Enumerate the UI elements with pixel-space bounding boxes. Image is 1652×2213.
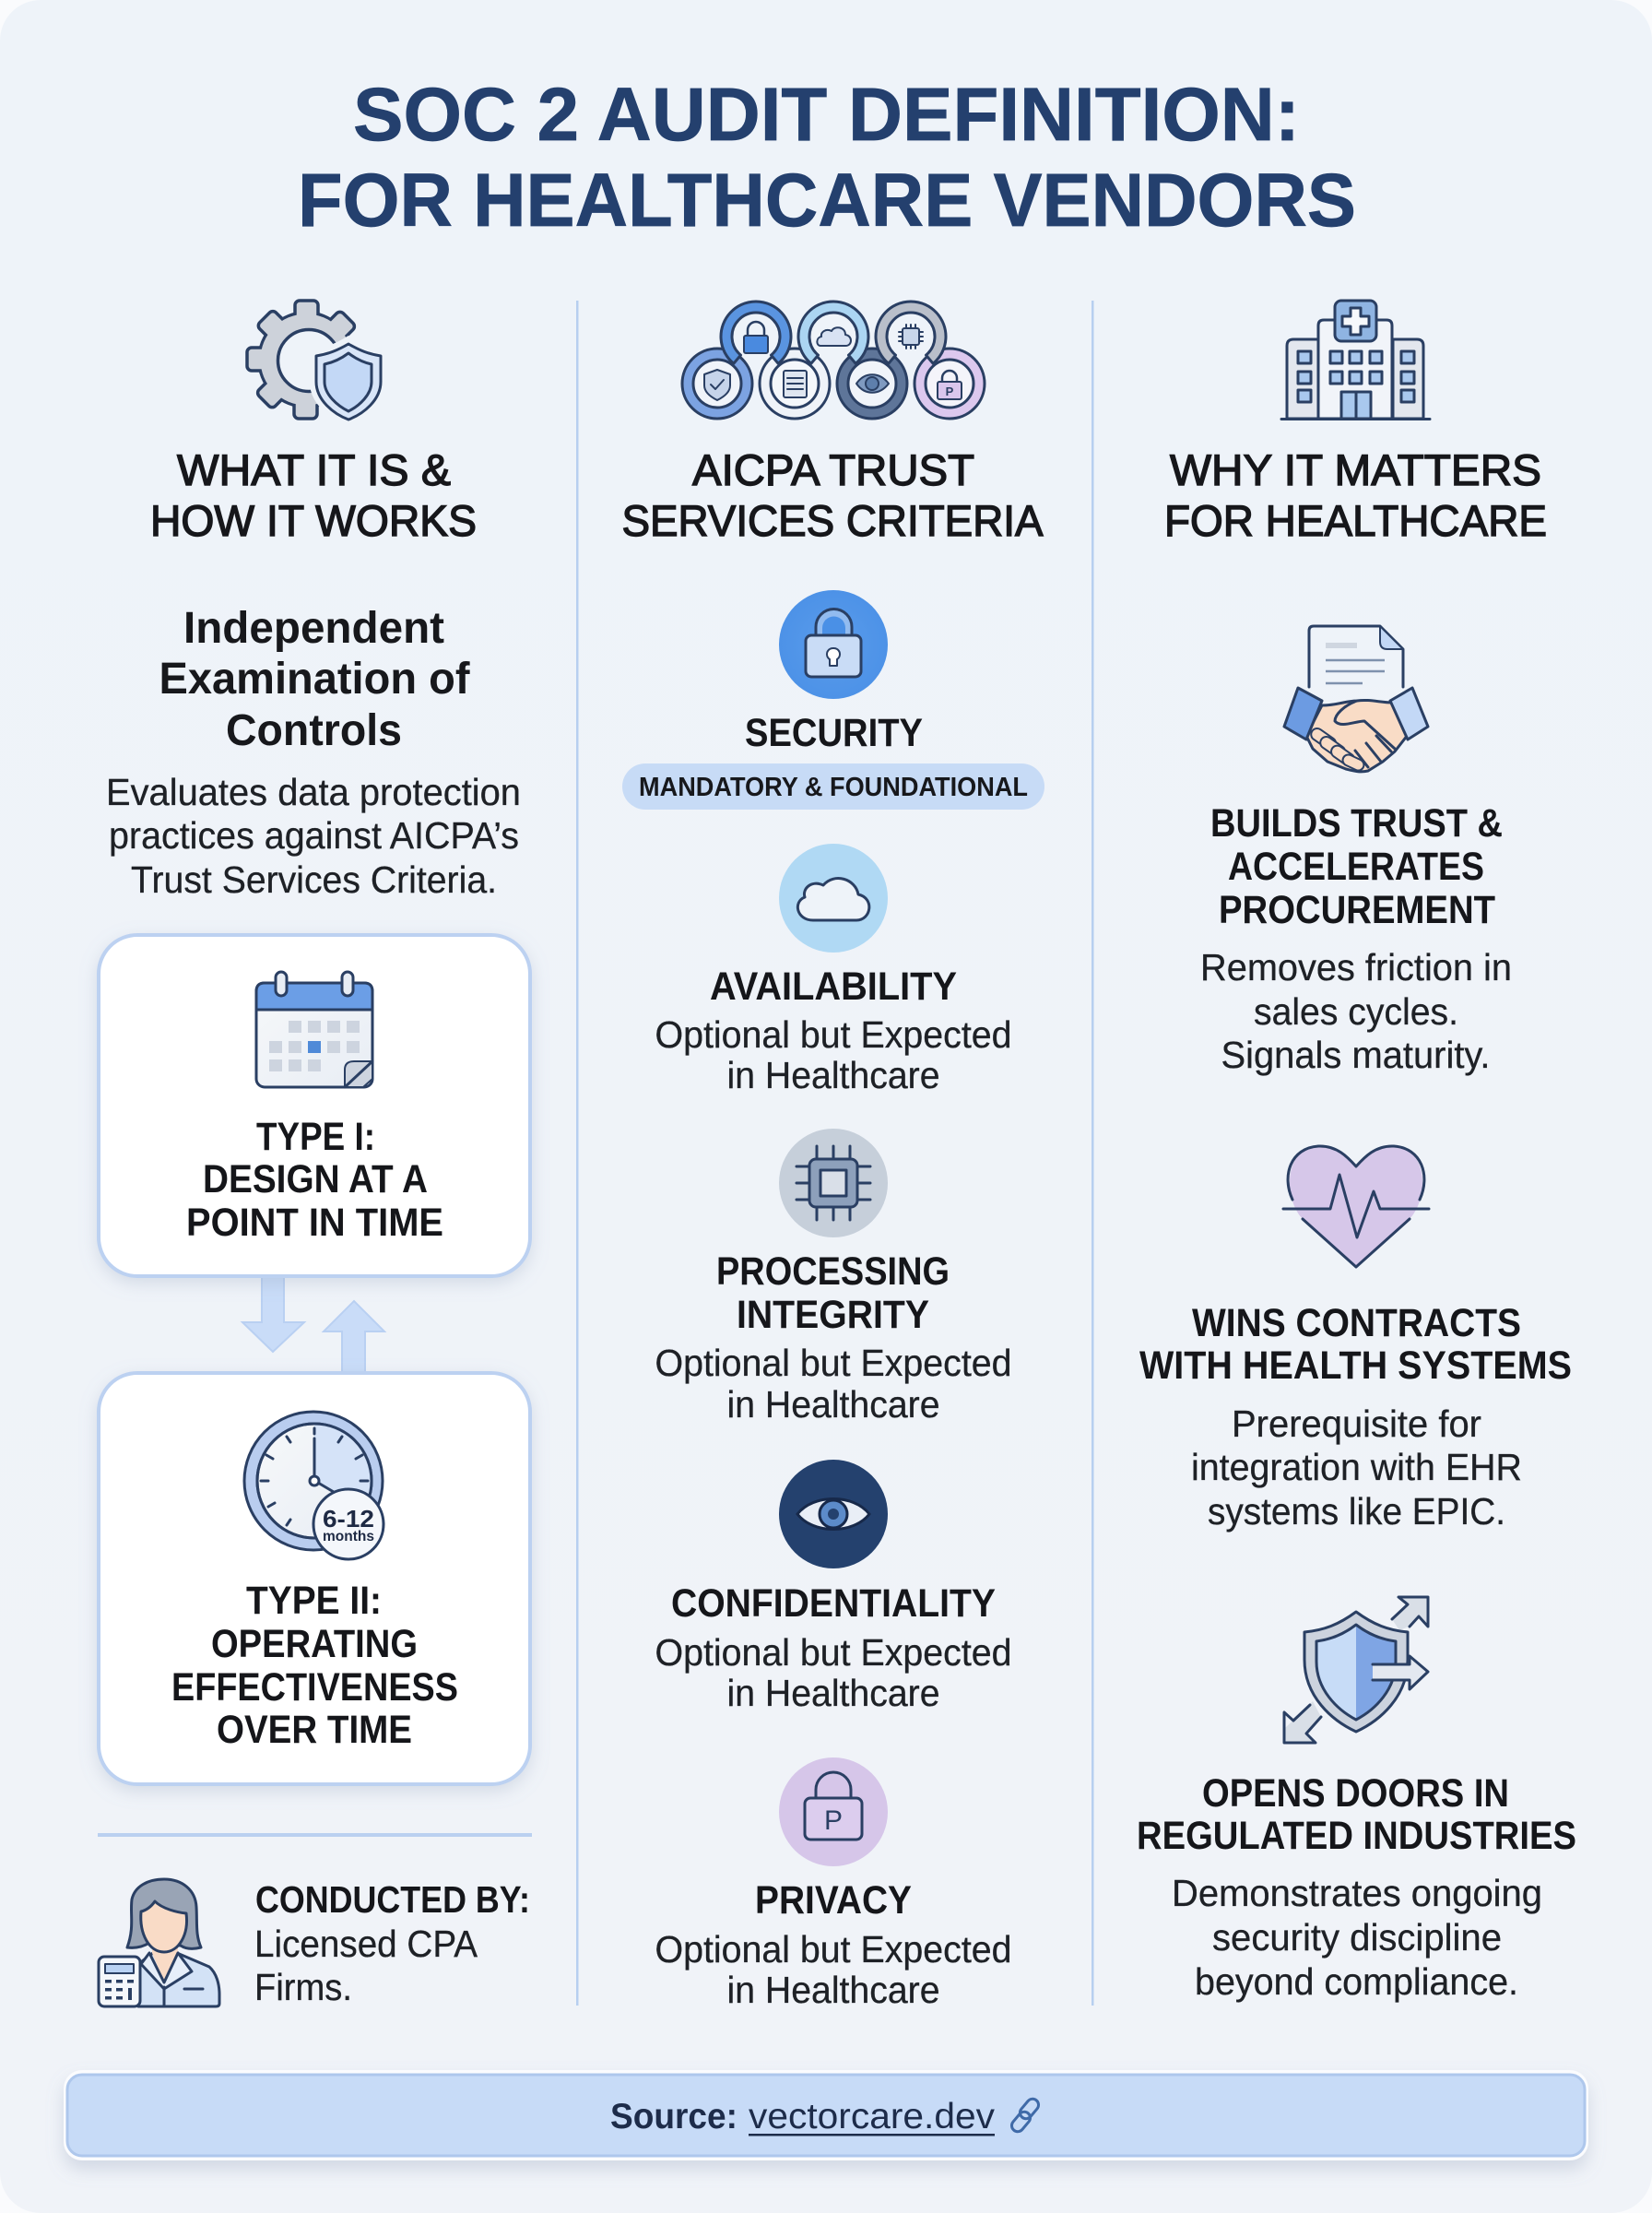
icon: linked rings of criteria: P: [946, 385, 954, 398]
subheading: independent examination: [159, 604, 470, 755]
criterion: availability: AVAILABILITY: [710, 964, 957, 1009]
icon: security padlock: [779, 590, 888, 699]
criterion: privacy: in Healthcare: [726, 1969, 940, 2011]
heading: AICPA trust services criteria: AICPA TRUST: [692, 445, 974, 494]
subheading: independent examination: Independent: [183, 604, 444, 653]
label: type II: TYPE II:: [246, 1579, 382, 1623]
title: FOR HEALTHCARE VENDORS: [298, 159, 1356, 243]
card: type I: [99, 935, 530, 1276]
criterion: availability: [655, 844, 1012, 1096]
heading: what it is: HOW IT WORKS: [150, 496, 477, 545]
card: type II: [99, 1373, 530, 1784]
badge: mandatory and foundational: MANDATORY & FOUNDATIONAL: [639, 773, 1028, 802]
benefit: opens doors: beyond compliance.: [1195, 1960, 1518, 2003]
label: type II: EFFECTIVENESS: [171, 1665, 458, 1710]
icon: cloud: [779, 844, 888, 953]
benefit: opens doors: [1137, 1597, 1576, 2003]
criterion: confidentiality: [655, 1460, 1012, 1714]
icon: clock with 6-12 months badge: 6-12: [323, 1505, 374, 1533]
benefit: builds trust: PROCUREMENT: [1219, 888, 1495, 932]
heading: AICPA trust services criteria: SERVICES CRITERIA: [621, 496, 1044, 545]
text block: conducted by: Licensed CPA: [254, 1923, 478, 1965]
label: type I: TYPE I:: [256, 1115, 375, 1159]
criterion: availability: Optional but Expected: [655, 1013, 1012, 1056]
heading: what it is: [150, 445, 477, 545]
criterion: processing integrity: [655, 1129, 1012, 1426]
criterion: confidentiality: Optional but Expected: [655, 1631, 1012, 1674]
criterion: privacy: Optional but Expected: [655, 1928, 1012, 1970]
icon: gear and shield: [247, 301, 387, 427]
label: type II: [171, 1579, 458, 1752]
benefit: builds trust: [1200, 626, 1512, 1076]
text block: evaluates data protection: Evaluates data protection: [106, 771, 521, 813]
arrow: up to type I: [324, 1301, 384, 1376]
heading: why it matters: FOR HEALTHCARE: [1164, 496, 1547, 545]
heading: why it matters: WHY IT MATTERS: [1170, 445, 1541, 494]
criterion: security: SECURITY: [745, 711, 923, 755]
icon: document and handshake: [1284, 626, 1428, 773]
benefit: wins contracts: WINS CONTRACTS: [1192, 1301, 1521, 1345]
benefit: opens doors: OPENS DOORS IN: [1202, 1771, 1509, 1816]
title: [298, 73, 1356, 243]
benefit: wins contracts: Prerequisite for: [1232, 1402, 1481, 1445]
benefit: opens doors: REGULATED INDUSTRIES: [1137, 1814, 1576, 1858]
label: type I: DESIGN AT A: [203, 1157, 428, 1201]
benefit: wins contracts: systems like EPIC.: [1208, 1490, 1505, 1533]
footer: source bar: vectorcare.dev: [749, 2097, 996, 2136]
subheading: independent examination: Controls: [226, 706, 402, 755]
heading: what it is: WHAT IT IS &: [177, 445, 451, 494]
benefit: opens doors: Demonstrates ongoing: [1172, 1872, 1542, 1914]
text block: evaluates data protection: Trust Services Criteria.: [131, 858, 497, 901]
icon: heart with pulse: [1283, 1146, 1429, 1267]
benefit: builds trust: ACCELERATES: [1228, 845, 1484, 889]
icon: link: [1009, 2097, 1041, 2134]
title: SOC 2 AUDIT DEFINITION:: [353, 73, 1300, 157]
text block: conducted by: Firms.: [254, 1966, 352, 2008]
criterion: security: [622, 590, 1044, 810]
label: type I: [186, 1115, 443, 1245]
icon: calendar: [256, 972, 372, 1087]
panel: AICPA trust services criteria: [621, 302, 1044, 2011]
benefit: builds trust: Removes friction in: [1200, 946, 1512, 988]
icon: chip: [779, 1129, 888, 1237]
criterion: processing integrity: Optional but Expected: [655, 1342, 1012, 1384]
text block: conducted by: [254, 1878, 530, 2008]
label: type II: OPERATING: [211, 1622, 418, 1666]
icon: privacy padlock: P: [824, 1805, 843, 1836]
icon: hospital: [1281, 301, 1430, 419]
benefit: opens doors: security discipline: [1212, 1916, 1502, 1959]
criterion: processing integrity: in Healthcare: [726, 1383, 940, 1426]
heading: AICPA trust services criteria: [621, 445, 1044, 545]
benefit: builds trust: sales cycles.: [1254, 990, 1458, 1033]
benefit: wins contracts: WITH HEALTH SYSTEMS: [1139, 1343, 1572, 1388]
icon: linked rings of criteria: [682, 302, 985, 419]
panel: why it matters for healthcare: [1137, 301, 1576, 2003]
heading: why it matters: [1164, 445, 1547, 545]
benefit: builds trust: Signals maturity.: [1221, 1034, 1490, 1076]
label: type II: OVER TIME: [217, 1708, 412, 1752]
benefit: wins contracts: [1139, 1146, 1572, 1533]
panel: what it is and how it works: [98, 301, 532, 2008]
text block: conducted by: CONDUCTED BY:: [255, 1878, 530, 1921]
icon: auditor with calculator: [99, 1879, 219, 2006]
icon: eye: [779, 1460, 888, 1568]
benefit: wins contracts: integration with EHR: [1191, 1446, 1522, 1488]
badge: mandatory and foundational: [622, 763, 1044, 810]
criterion: confidentiality: in Healthcare: [726, 1672, 940, 1714]
criterion: availability: in Healthcare: [726, 1054, 940, 1096]
criterion: confidentiality: CONFIDENTIALITY: [671, 1581, 996, 1626]
arrow: down to type II: [242, 1274, 304, 1352]
criterion: privacy: [655, 1757, 1012, 2011]
criterion: processing integrity: PROCESSING: [716, 1249, 950, 1294]
icon: clock with 6-12 months badge: months: [323, 1529, 374, 1544]
benefit: builds trust: BUILDS TRUST &: [1210, 801, 1503, 846]
criterion: processing integrity: INTEGRITY: [737, 1293, 929, 1337]
criterion: privacy: PRIVACY: [755, 1878, 912, 1923]
icon: privacy padlock: [779, 1757, 888, 1866]
label: type I: POINT IN TIME: [186, 1201, 443, 1245]
footer: source bar: Source:: [610, 2097, 738, 2136]
icon: shield with arrows: [1284, 1597, 1428, 1743]
text block: evaluates data protection: [106, 771, 521, 901]
icon: clock with 6-12 months badge: [244, 1412, 384, 1559]
subheading: independent examination: Examination of: [159, 655, 470, 704]
footer: source bar: [64, 2070, 1588, 2160]
text block: evaluates data protection: practices against AICPA’s: [109, 814, 519, 857]
